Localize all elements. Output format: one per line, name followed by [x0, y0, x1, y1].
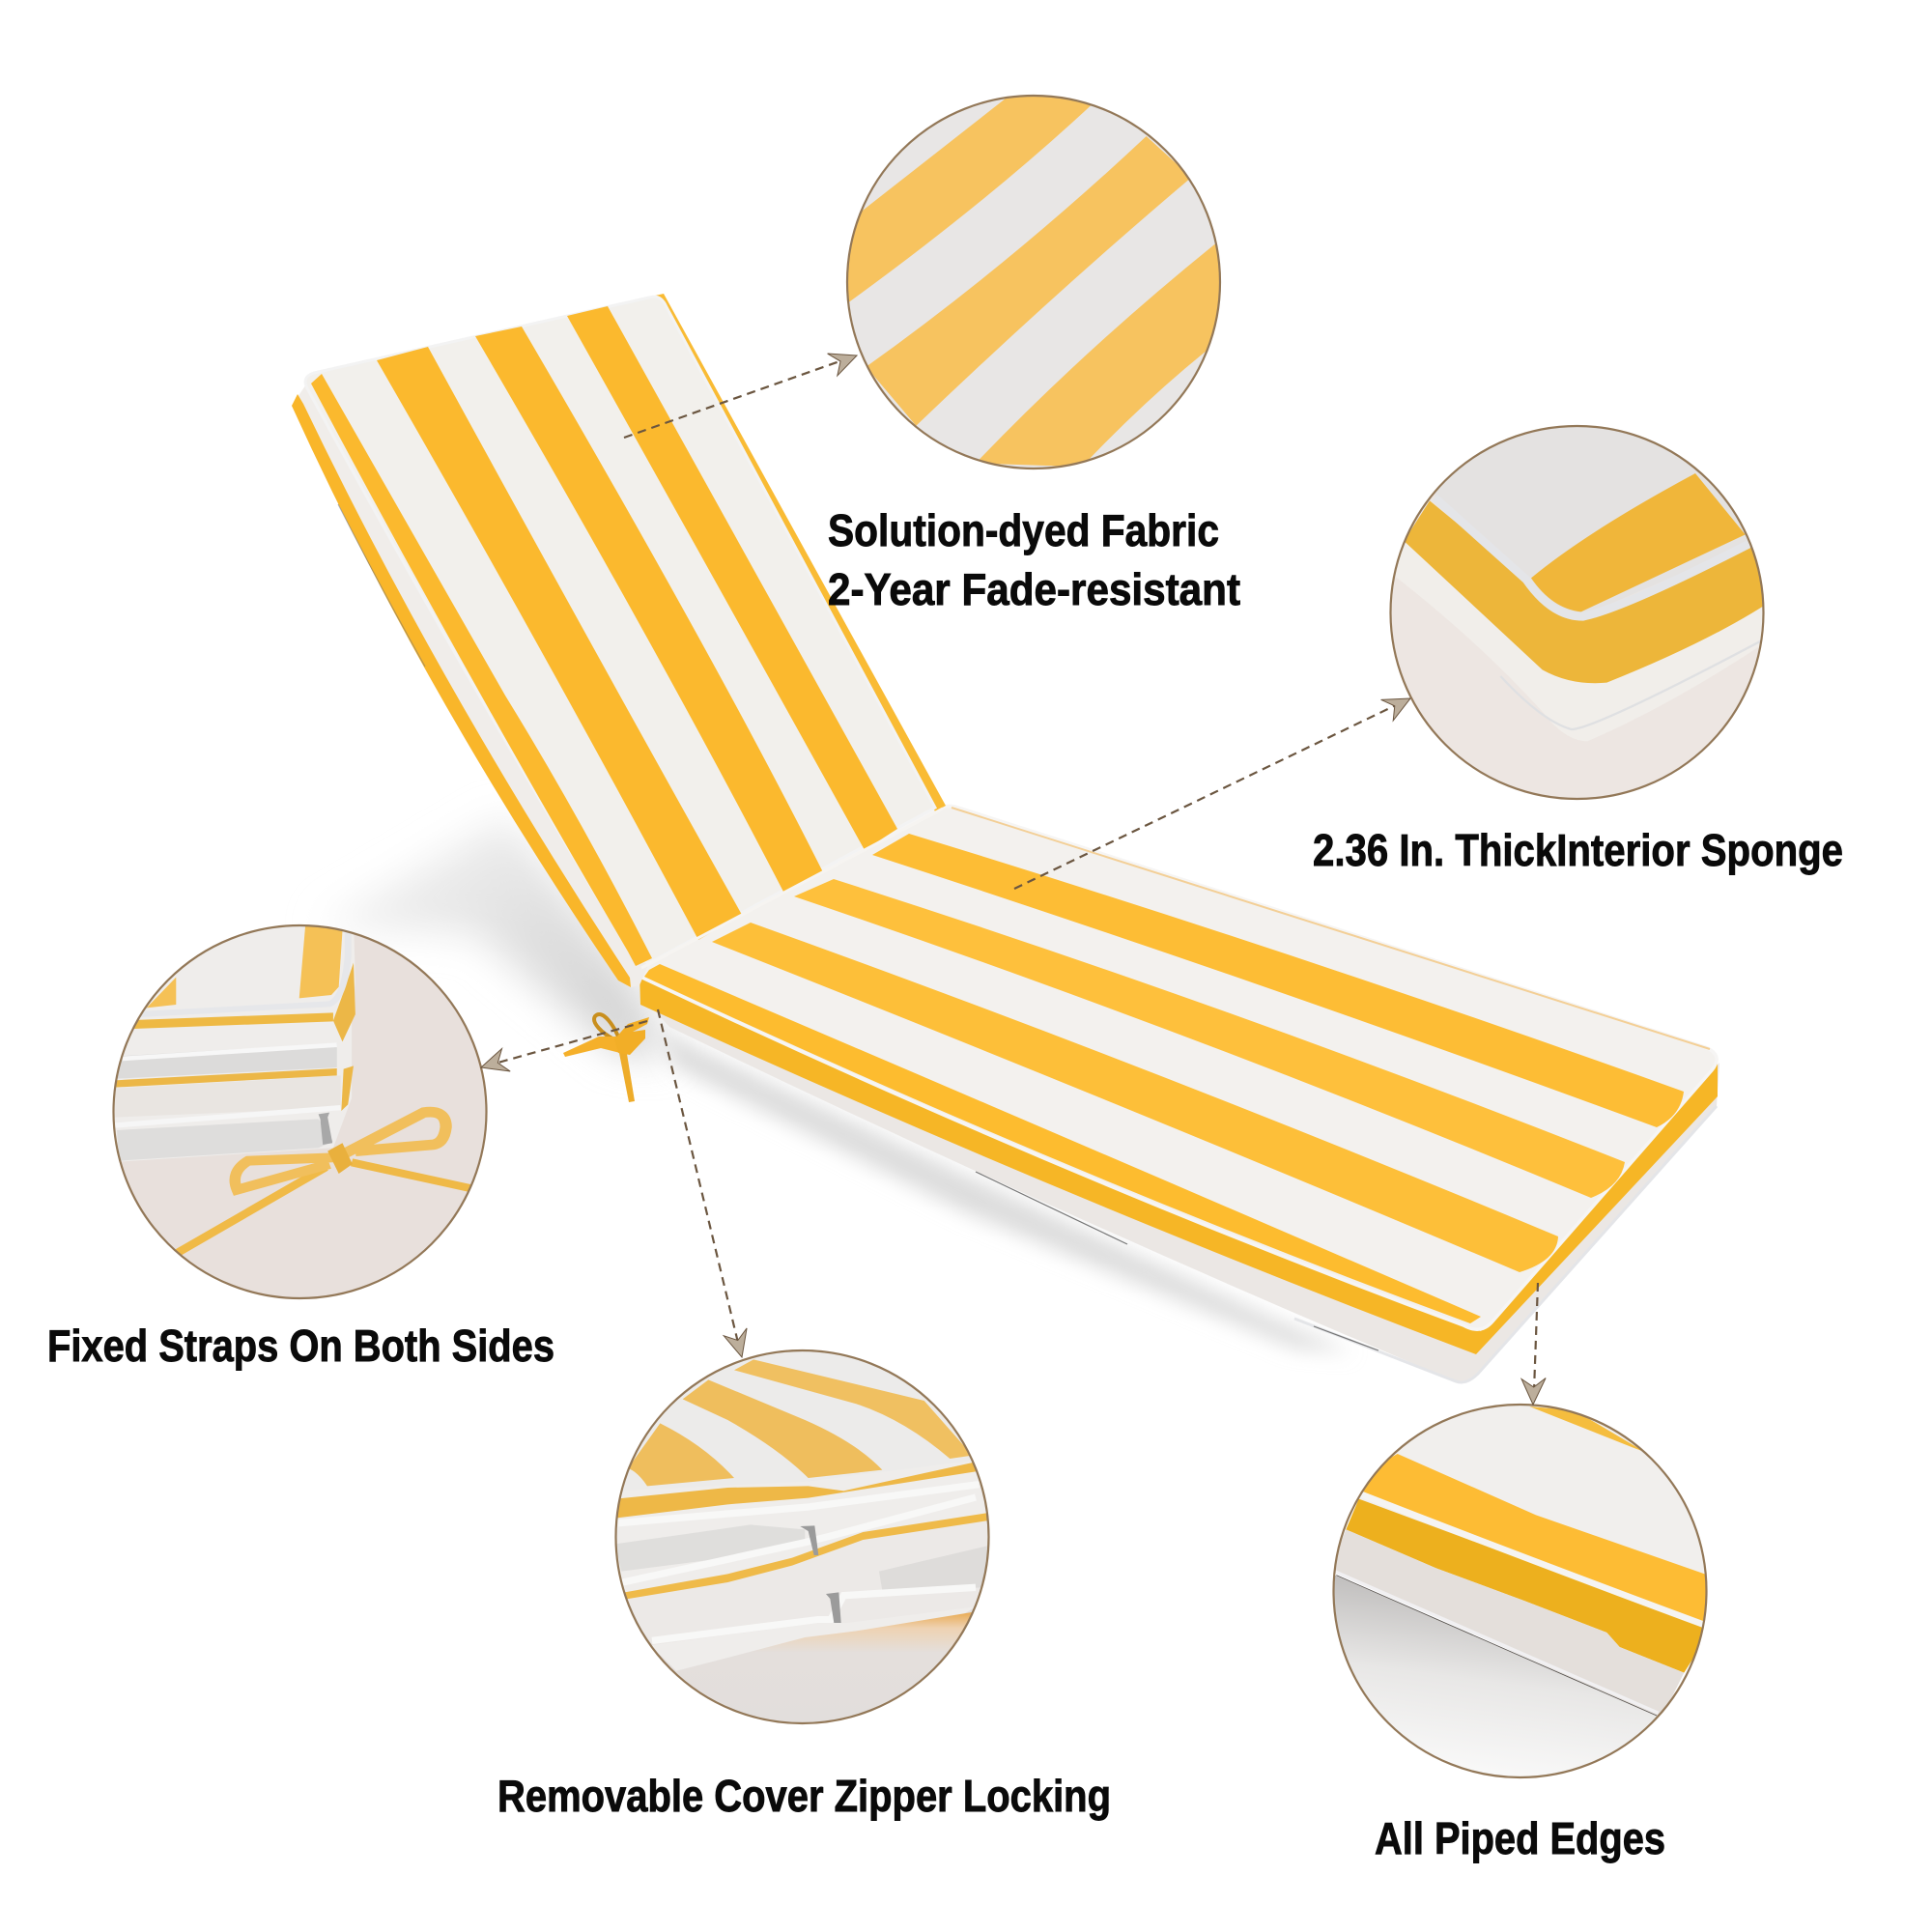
- straps top yellow small: [147, 978, 176, 1008]
- seat stripe 3: [794, 879, 1625, 1198]
- zipper slider upper: [800, 1525, 818, 1555]
- label: solution-dyed fabric: Solution-dyed Fabric: [828, 505, 1219, 555]
- straps white piping lower: [115, 1108, 341, 1125]
- straps gray layer upper: [118, 1047, 337, 1078]
- zipper upper yellow band: [615, 1462, 976, 1519]
- bow lower tail: [618, 1048, 635, 1102]
- arrow to sponge circle: [1014, 688, 1416, 889]
- label: piped edges: All Piped Edges: [1375, 1813, 1665, 1863]
- fabric detail: [848, 97, 1219, 468]
- straps yellow seam lower: [115, 1068, 337, 1088]
- seat stripe 1: [644, 964, 1481, 1323]
- backrest side white fabric: [292, 373, 649, 987]
- arrow to zipper circle: [658, 1009, 753, 1360]
- label: removable cover: Removable Cover Zipper Locking: [497, 1771, 1111, 1821]
- tie strap bow: [563, 1014, 649, 1102]
- zipper background: [645, 1608, 974, 1673]
- callout circle: solution-dyed fabric: [831, 87, 1227, 473]
- strap knot: [327, 1143, 353, 1174]
- straps background: [122, 935, 485, 1297]
- seat top white face: [638, 806, 1717, 1329]
- zipper lower yellow band: [625, 1513, 988, 1600]
- straps cushion white body: [114, 926, 355, 1161]
- backrest top white face: [305, 297, 935, 963]
- fabric stripe a: [848, 97, 1091, 301]
- panel: chaise cushion: [292, 294, 1719, 1382]
- piped bottom piping: [1333, 1571, 1659, 1713]
- zipper stripe c: [628, 1423, 734, 1486]
- straps yellow seam upper: [133, 1012, 333, 1029]
- arrow to fabric circle: [624, 345, 861, 438]
- seat stripe 4: [872, 834, 1684, 1127]
- backrest stripe 4: [567, 306, 897, 850]
- zipper top white face: [623, 1351, 971, 1491]
- bow knot and right loop: [614, 1017, 649, 1055]
- sponge side yellow band: [1404, 500, 1768, 683]
- backrest side yellow band: [292, 394, 631, 987]
- piped side yellow band: [1346, 1499, 1707, 1673]
- sponge side white fabric: [1391, 538, 1768, 741]
- zipper stripe b: [683, 1379, 882, 1478]
- piped shadow: [1323, 1573, 1662, 1794]
- straps piping: [139, 930, 348, 1014]
- sponge lower piping: [1500, 640, 1761, 729]
- zipper cushion bottom: [650, 1606, 976, 1670]
- backrest cushion: [292, 294, 946, 987]
- piped top white face: [1323, 1391, 1710, 1649]
- zipper pull: [319, 1113, 332, 1145]
- sponge ring: [1391, 426, 1764, 799]
- straps white piping upper: [123, 1045, 337, 1059]
- ground shadow under backrest: [319, 817, 667, 1058]
- fabric stripe c: [976, 235, 1227, 467]
- straps right yellow lower: [341, 1065, 354, 1111]
- straps gray layer lower: [117, 1119, 333, 1161]
- strap left loop: [235, 1157, 333, 1190]
- sponge upper piping: [1435, 497, 1748, 616]
- piped hairline: [1336, 1576, 1657, 1716]
- zipper upper white fabric: [615, 1459, 988, 1597]
- piped background: [1328, 1401, 1715, 1787]
- straps ring: [114, 925, 487, 1298]
- backrest side hairline: [338, 504, 425, 667]
- arrow to piped circle: [1520, 1283, 1546, 1405]
- backrest stripe 2: [377, 347, 742, 940]
- strap right tail: [352, 1162, 470, 1188]
- label: fixed straps: Fixed Straps On Both Sides: [47, 1321, 554, 1371]
- backrest right edge yellow: [655, 294, 946, 811]
- zipper slider lower: [826, 1592, 841, 1623]
- arrow to straps circle: [478, 1021, 647, 1079]
- callout circle: fixed straps: [97, 918, 493, 1304]
- seat far edge yellow line: [952, 808, 1710, 1049]
- zipper ring: [616, 1350, 989, 1723]
- backrest stripe 1: [311, 374, 652, 966]
- zipper white piping: [618, 1485, 979, 1640]
- bow left tail: [563, 1037, 620, 1057]
- straps top yellow stripe: [299, 924, 342, 998]
- backrest stripe 3: [475, 327, 823, 894]
- piped side gray fabric: [1330, 1529, 1684, 1718]
- piped white piping: [1360, 1494, 1703, 1625]
- ground shadow under seat: [657, 1029, 1352, 1352]
- label: solution-dyed fabric: 2-Year Fade-resistant: [828, 564, 1240, 614]
- piped upper yellow stripe: [1529, 1406, 1645, 1452]
- sponge top white face: [1435, 427, 1748, 612]
- zipper lower white fabric: [618, 1517, 992, 1671]
- zipper stripe a: [734, 1359, 973, 1459]
- straps white layer lower: [115, 1075, 341, 1118]
- zipper floor reflection: [664, 1611, 1017, 1729]
- strap right loop: [337, 1112, 446, 1157]
- seat bottom piping: [1294, 1106, 1717, 1382]
- seat side hairlines: [976, 1172, 1378, 1350]
- callout circle: zipper cover: [614, 1349, 990, 1725]
- seat cushion: [638, 806, 1719, 1382]
- callout circle: piped edges: [1323, 1391, 1715, 1794]
- fabric background: [840, 87, 1227, 473]
- piped main yellow stripe: [1359, 1454, 1707, 1630]
- seat hinge piping: [641, 809, 943, 968]
- piped ring: [1333, 1405, 1706, 1777]
- straps right yellow edge: [333, 963, 355, 1041]
- sponge background: [1391, 493, 1762, 798]
- seat side white fabric: [639, 995, 1719, 1382]
- seat stripe 2: [712, 923, 1558, 1272]
- zipper open compartment left: [615, 1524, 805, 1572]
- zipper open compartment right: [879, 1546, 988, 1591]
- strap left tail: [178, 1167, 326, 1253]
- label: interior sponge: 2.36 In. ThickInterior Sponge: [1313, 825, 1843, 875]
- sponge top yellow stripe: [1531, 473, 1746, 611]
- fabric ring: [847, 96, 1220, 469]
- fabric stripe b: [867, 136, 1191, 426]
- callout circle: interior sponge thickness: [1381, 415, 1777, 811]
- bow loop: [594, 1014, 620, 1041]
- seat side yellow band: [639, 974, 1718, 1354]
